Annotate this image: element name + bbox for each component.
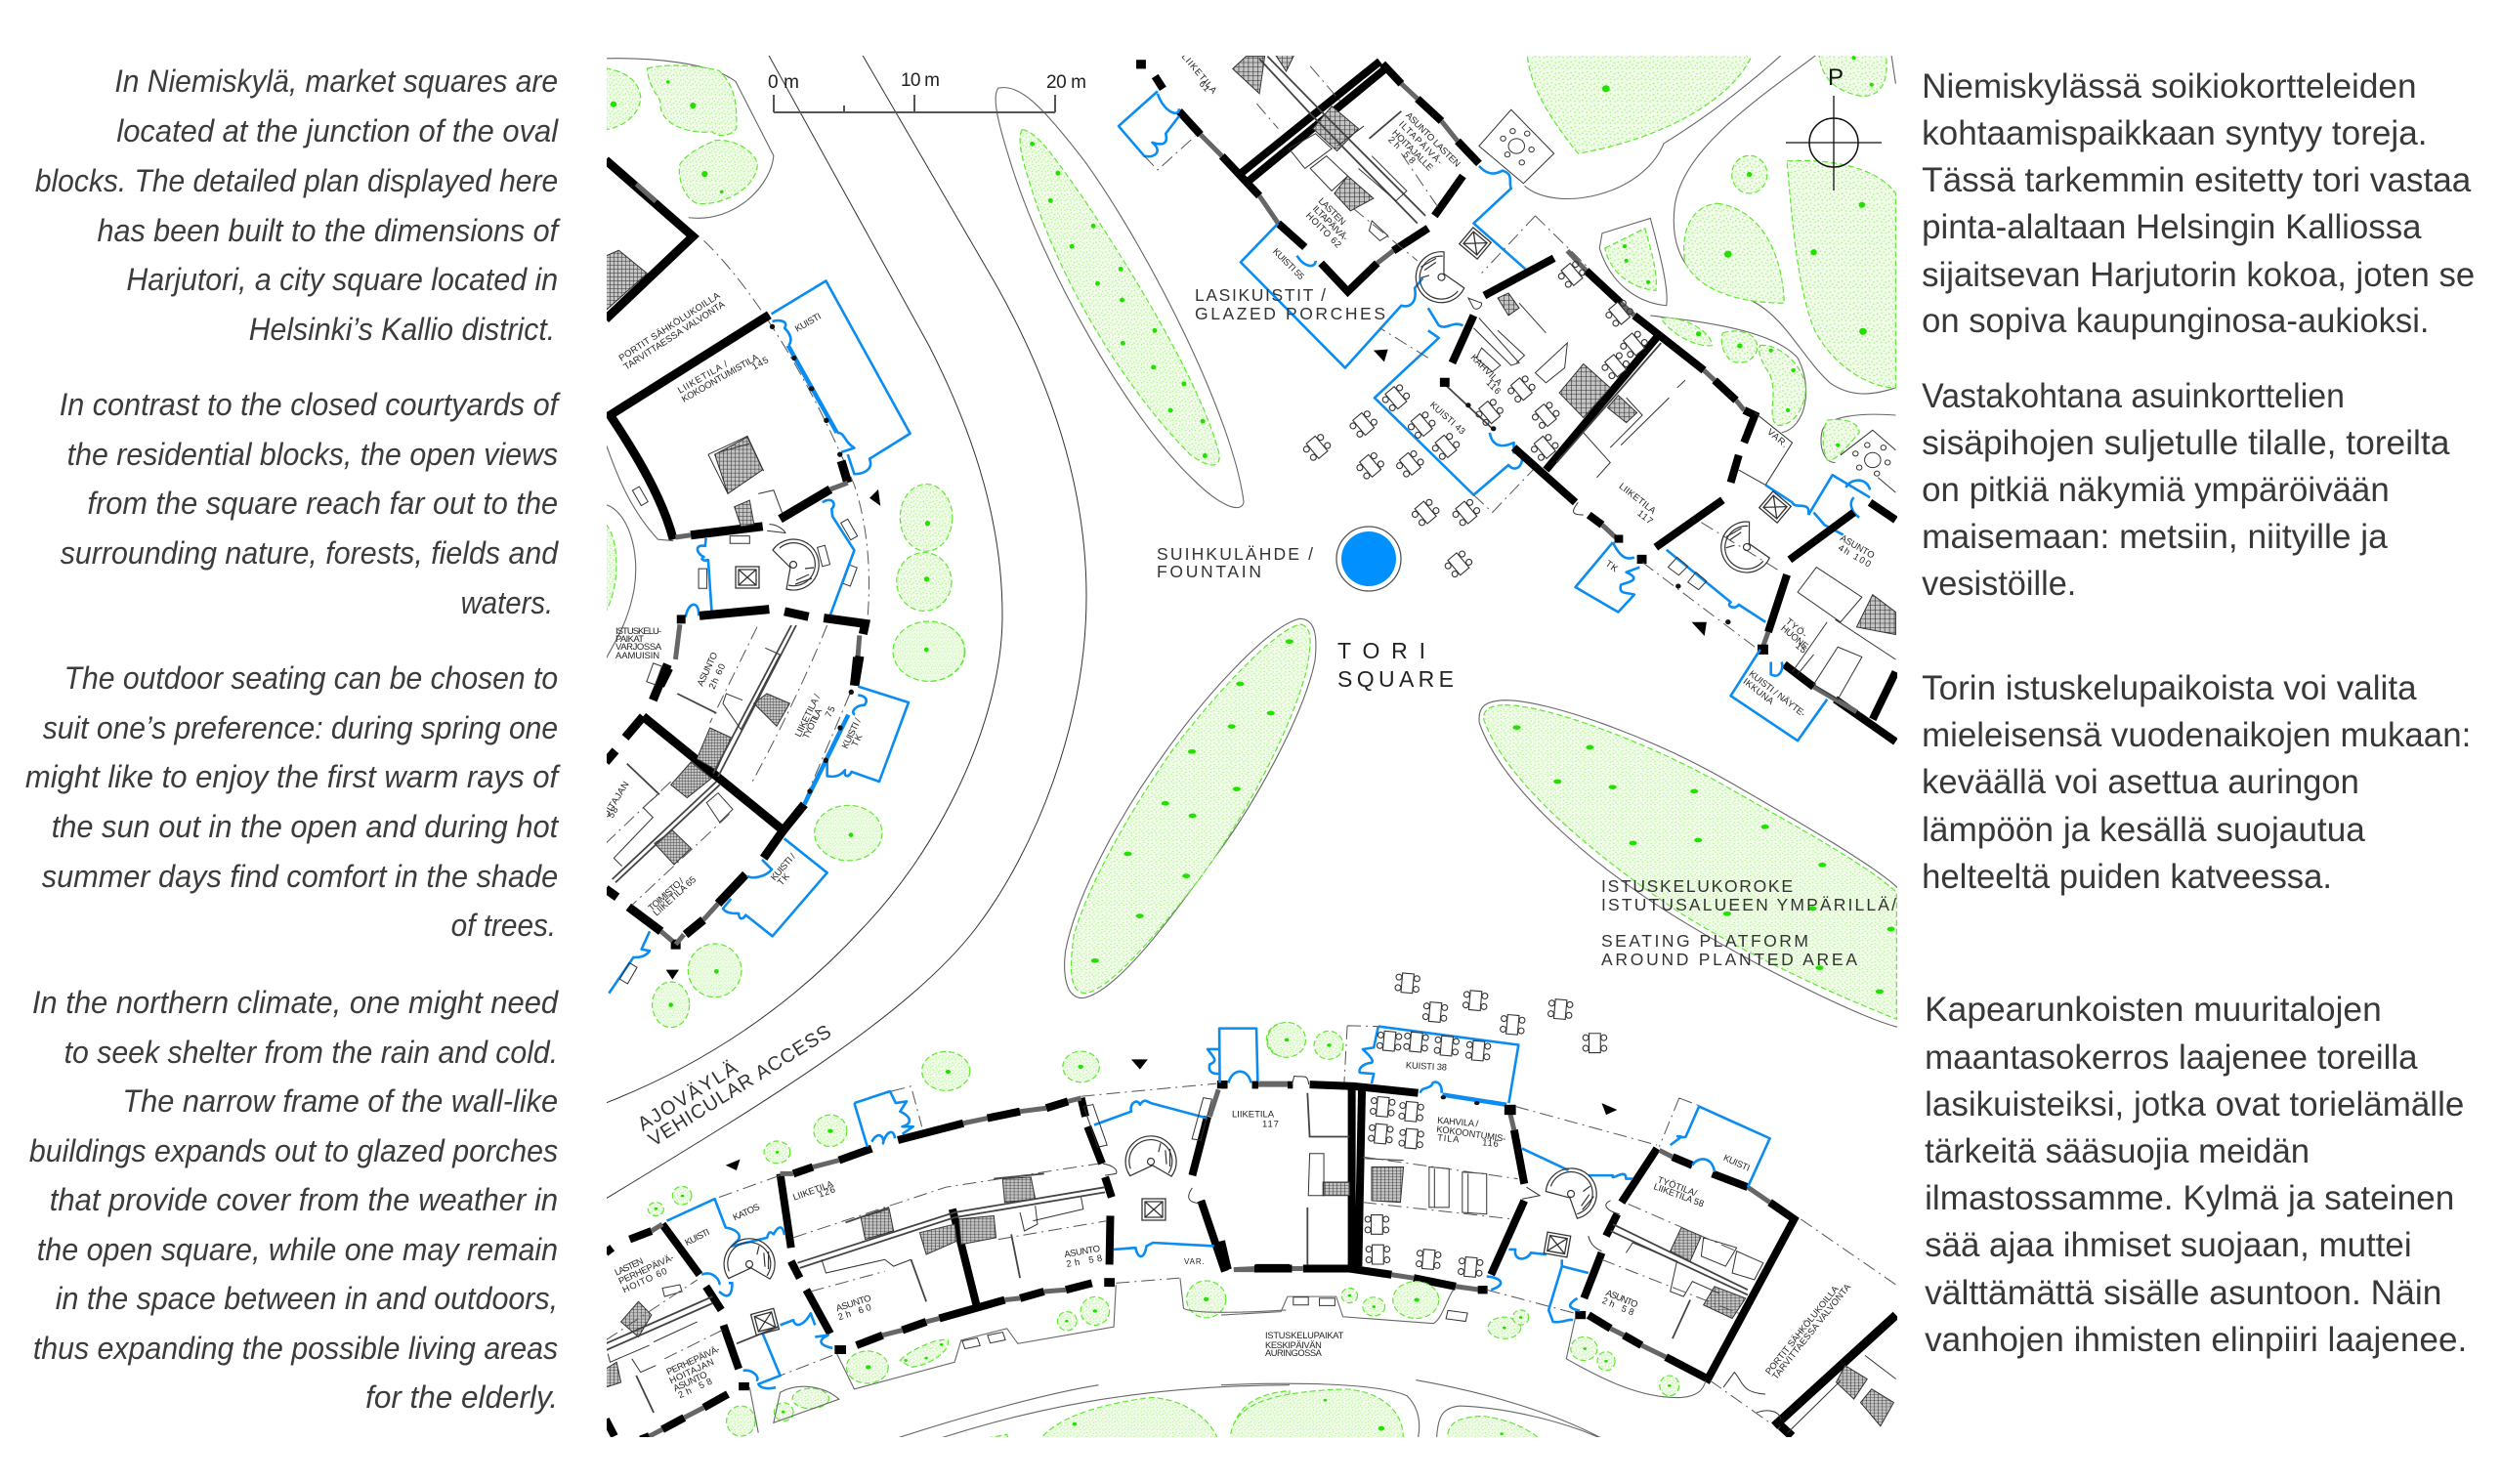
- kappale: istuskelupaikat: Torin istuskelupaikoista voi valita: [1922, 669, 2417, 707]
- labels: south east buildings: TARVITTAESSA VALVONTA: [1770, 1282, 1853, 1381]
- labels: west buildings: PORTIT SÄHKÖLUKOILLA: [617, 290, 723, 364]
- labels: north east buildings: KUISTI 43: [1428, 399, 1468, 437]
- kappale: lasikuistit: maantasokerros laajenee toreilla: [1925, 1039, 2418, 1077]
- building: east apartment: [1731, 502, 1895, 742]
- cafe and square tables: north east: [1301, 259, 1649, 579]
- labels: west buildings: HOITAJAN: [597, 779, 632, 827]
- paragraph: market squares: Harjutori, a city square located in: [126, 262, 558, 297]
- paragraph: outdoor seating: suit one’s preference: during spring one: [43, 710, 558, 745]
- planting strip: [648, 1051, 1290, 1443]
- kappale: Niemiskylän torit: kohtaamispaikkaan syntyy toreja.: [1922, 114, 2428, 152]
- labels: north east buildings: KAHVILA: [1468, 352, 1505, 388]
- pavilion seating circle: [1841, 430, 1895, 492]
- labels: north east buildings: 61: [1197, 78, 1213, 95]
- paragraph: northern climate: The narrow frame of the wall-like: [122, 1083, 558, 1119]
- callout: seating platform: SEATING PLATFORM: [1601, 931, 1808, 951]
- kappale: lasikuistit: lasikuisteiksi, jotka ovat torielämälle: [1925, 1085, 2464, 1124]
- labels: west buildings: TARVITTAESSA VALVONTA: [622, 299, 728, 373]
- paragraph: northern climate: the open square, while one may remain: [37, 1232, 558, 1267]
- planting bed: south west: [1065, 618, 1316, 998]
- labels: north east buildings: 2h 58: [1386, 134, 1419, 166]
- paragraph: northern climate: for the elderly.: [365, 1379, 558, 1415]
- paragraph: northern climate: buildings expands out to glazed porches: [29, 1133, 558, 1168]
- scale bar: [768, 70, 1086, 112]
- labels: south west buildings: PERHEPÄIVÄ-: [664, 1343, 722, 1377]
- labels: south west buildings: [613, 1109, 1280, 1400]
- kappale: lasikuistit: ilmastossamme. Kylmä ja sateinen: [1925, 1179, 2454, 1217]
- labels: south east buildings: AURINGOSSA: [1265, 1348, 1323, 1358]
- labels: west buildings: KUISTI /: [840, 716, 865, 750]
- labels: north east buildings: LASTEN: [1317, 195, 1349, 228]
- labels: west buildings: TYÖTILA: [801, 706, 826, 741]
- labels: north east buildings: TYÖ-: [1784, 615, 1810, 640]
- labels: west buildings: 75: [824, 703, 838, 719]
- labels: north east buildings: HOITAJALLE: [1390, 127, 1436, 173]
- porch: kuisti 55: [1119, 91, 1589, 512]
- central passage west: [726, 1029, 1290, 1271]
- paragraph: outdoor seating: of trees.: [451, 908, 556, 943]
- labels: south west buildings: ASUNTO: [834, 1292, 873, 1313]
- kappale: Niemiskylän torit: Tässä tarkemmin esitetty tori vastaa: [1922, 161, 2472, 199]
- callout: seating platform: ISTUSKELUKOROKE: [1601, 876, 1793, 896]
- north east planting beds: [1524, 55, 1895, 462]
- paragraph: northern climate: that provide cover from the weather in: [50, 1182, 558, 1217]
- labels: south east buildings: TILA: [1437, 1132, 1461, 1145]
- paragraph: market squares: blocks. The detailed plan displayed here: [35, 163, 558, 198]
- north east corner of south block: [1723, 1315, 1896, 1436]
- labels: west buildings: [597, 290, 866, 918]
- paragraph: market squares: Helsinki’s Kallio district.: [249, 312, 555, 347]
- callout: glazed porches: [1196, 288, 1385, 319]
- labels: north east buildings: VAR.: [1765, 426, 1791, 450]
- heading: tori / square: [1338, 643, 1453, 692]
- paragraph: market squares: [35, 64, 561, 347]
- labels: south east buildings: ISTUSKELUPAIKAT: [1265, 1331, 1344, 1340]
- labels: south west buildings: VAR.: [1184, 1257, 1206, 1266]
- labels: south west buildings: 117: [1262, 1119, 1280, 1129]
- labels: south east buildings: KUISTI 38: [1406, 1060, 1448, 1073]
- callout: vehicular access: VEHICULAR ACCESS: [645, 1021, 835, 1151]
- north arrow: [1786, 64, 1882, 191]
- labels: west buildings: LIIKETILA 65: [652, 874, 699, 918]
- text panel: Finnish description: [1922, 67, 2475, 1359]
- labels: south east buildings: ASUNTO: [1604, 1288, 1640, 1310]
- building: children's day care: [1136, 55, 1479, 291]
- porch: kuisti 38: [1344, 1026, 1518, 1105]
- labels: west buildings: TOIMISTO /: [647, 875, 687, 913]
- labels: west buildings: KUISTI: [793, 311, 824, 335]
- labels: north east buildings: TK: [1604, 558, 1621, 574]
- labels: north east buildings: HOITO 62: [1304, 210, 1344, 250]
- labels: south west buildings: LASTEN: [613, 1254, 646, 1278]
- kappale: Niemiskylän torit: sijaitsevan Harjutorin kokoa, joten se: [1922, 256, 2475, 294]
- labels: west buildings: AAMUISIN: [615, 651, 660, 661]
- paragraph: market squares: has been built to the dimensions of: [97, 213, 561, 248]
- lift shafts: [736, 228, 1791, 1336]
- labels: south west buildings: ASUNTO: [1063, 1243, 1102, 1259]
- planting bed: south east: [1479, 700, 1899, 1028]
- paragraph: northern climate: to seek shelter from the rain and cold.: [64, 1035, 558, 1070]
- paragraph: outdoor seating: the sun out in the open and during hot: [52, 809, 559, 844]
- paragraph: open views: the residential blocks, the open views: [67, 437, 558, 472]
- labels: south east buildings: LIIKETILA 58: [1652, 1181, 1706, 1209]
- labels: west buildings: LIIKETILA /: [676, 359, 731, 397]
- labels: south west buildings: HOITAJAN: [667, 1356, 716, 1385]
- labels: west buildings: 2h 60: [707, 661, 729, 691]
- paragraph: outdoor seating: might like to enjoy the first warm rays of: [25, 759, 561, 794]
- kappale: Niemiskylän torit: Niemiskylässä soikiokortteleiden: [1922, 67, 2417, 106]
- labels: south west buildings: 2h 58: [1065, 1252, 1104, 1269]
- paragraph: northern climate: [29, 985, 559, 1415]
- kappale: näkymät: sisäpihojen suljetulle tilalle, toreilta: [1922, 424, 2450, 462]
- labels: north east buildings: ILTAPÄIVÄ-: [1397, 118, 1446, 167]
- labels: south west buildings: 2h 58: [676, 1375, 714, 1400]
- kappale: näkymät: [1922, 377, 2450, 603]
- south west buildings: [606, 1023, 1301, 1443]
- room labels: [597, 51, 1878, 1400]
- labels: north east buildings: ASUNTO: [1839, 532, 1878, 561]
- callout: glazed porches: LASIKUISTIT /: [1195, 285, 1326, 305]
- labels: west buildings: KOKOONTUMISTILA: [680, 352, 761, 405]
- paragraph: northern climate: thus expanding the possible living areas: [33, 1331, 558, 1366]
- callout: fountain: SUIHKULÄHDE /: [1157, 544, 1313, 564]
- labels: south west buildings: PERHEPÄIVÄ-: [616, 1251, 676, 1287]
- text panel: English description: [25, 64, 561, 1415]
- road edge lines: [606, 54, 1086, 1199]
- labels: south east buildings: KOKOONTUMIS-: [1436, 1124, 1507, 1144]
- south oval planting beds: [1065, 618, 1899, 1028]
- labels: north east buildings: 116: [1484, 377, 1505, 397]
- labels: south east buildings: PORTIT SÄHKÖLUKOILLA: [1763, 1284, 1841, 1377]
- scale bar: 20 m: [1046, 72, 1086, 93]
- labels: north east buildings: KUISTI / NÄYTE-: [1747, 668, 1808, 719]
- labels: west buildings: 58: [606, 804, 621, 821]
- callout: seating platform: ISTUTUSALUEEN YMPÄRILLÄ/: [1601, 895, 1896, 914]
- labels: west buildings: 145: [750, 355, 772, 373]
- site plan drawing: [597, 51, 1899, 1443]
- labels: north east buildings: HUONE: [1779, 622, 1811, 652]
- labels: north east buildings: LIIKETILA: [1617, 481, 1659, 516]
- kappale: näkymät: maisemaan: metsiin, niityille ja: [1922, 518, 2388, 556]
- kappale: näkymät: on pitkiä näkymiä ympäröivään: [1922, 471, 2390, 509]
- kappale: lasikuistit: välttämättä sisälle asuntoon. Näin: [1925, 1274, 2441, 1312]
- kappale: lasikuistit: [1925, 991, 2467, 1359]
- labels: south west buildings: 126: [817, 1183, 837, 1200]
- labels: south west buildings: LIIKETILA: [1232, 1109, 1275, 1120]
- kappale: näkymät: vesistöille.: [1922, 565, 2076, 603]
- building: family day care: [606, 1083, 1216, 1439]
- labels: south east buildings: [1265, 1060, 1853, 1381]
- callout: seating platform: [1601, 876, 1896, 969]
- labels: west buildings: ISTUSKELU-: [615, 626, 662, 637]
- oval planting bed: north: [996, 88, 1244, 508]
- scale bar: 10 m: [901, 70, 940, 91]
- building: liiketila 126: [666, 1086, 1115, 1388]
- kappale: lasikuistit: sää ajaa ihmiset suojaan, muttei: [1925, 1226, 2412, 1264]
- paragraph: market squares: In Niemiskylä, market squares are: [114, 64, 558, 99]
- south strip planting and benches: [1221, 1022, 1706, 1443]
- labels: north east buildings: IKKUNA: [1741, 676, 1777, 707]
- labels: south east buildings: KUISTI: [1722, 1153, 1752, 1173]
- paragraph: open views: from the square reach far out to the: [88, 486, 558, 521]
- kappale: näkymät: Vastakohtana asuinkorttelien: [1922, 377, 2345, 415]
- labels: west buildings: KUISTI /: [769, 851, 799, 883]
- labels: north east buildings: [1180, 51, 1878, 719]
- south east buildings: [1221, 1022, 1896, 1443]
- labels: west buildings: ASUNTO: [696, 650, 721, 688]
- paragraph: outdoor seating: The outdoor seating can be chosen to: [64, 660, 558, 696]
- paragraph: open views: In contrast to the closed courtyards of: [60, 387, 561, 422]
- labels: north east buildings: LIIKETILA: [1180, 51, 1220, 96]
- kappale: istuskelupaikat: mieleisensä vuodenaikojen mukaan:: [1922, 716, 2471, 754]
- paragraph: outdoor seating: [25, 660, 561, 943]
- spiral stairs: [718, 248, 1771, 1293]
- callout: fountain: FOUNTAIN: [1157, 562, 1261, 581]
- heading: tori / square: SQUARE: [1337, 666, 1454, 692]
- labels: south east buildings: 116: [1482, 1137, 1500, 1149]
- kappale: lasikuistit: vanhojen ihmisten elinpiiri laajenee.: [1925, 1321, 2467, 1359]
- kappale: lasikuistit: tärkeitä sääsuojia meidän: [1925, 1132, 2310, 1170]
- kappale: lasikuistit: Kapearunkoisten muuritalojen: [1925, 991, 2382, 1029]
- paragraph: outdoor seating: summer days find comfort in the shade: [42, 859, 558, 894]
- heading: tori / square: TORI: [1337, 638, 1425, 663]
- callout: fountain: [1157, 545, 1313, 577]
- labels: west buildings: TK: [850, 732, 866, 748]
- labels: north east buildings: ASUNTO LASTEN: [1404, 109, 1463, 170]
- kappale: istuskelupaikat: keväällä voi asettua auringon: [1922, 763, 2359, 801]
- labels: north east buildings: 4h 100: [1837, 542, 1874, 570]
- paragraph: open views: surrounding nature, forests, fields and: [61, 535, 559, 571]
- labels: south west buildings: 2h 60: [836, 1301, 873, 1322]
- labels: west buildings: LIIKETILA /: [793, 692, 824, 739]
- paragraph: northern climate: In the northern climate, one might need: [32, 985, 559, 1020]
- kappale: Niemiskylän torit: pinta-alaltaan Helsingin Kalliossa: [1922, 208, 2422, 246]
- paragraph: market squares: located at the junction of the oval: [116, 113, 559, 148]
- labels: west buildings: TK: [776, 870, 792, 888]
- paragraph: northern climate: in the space between in and outdoors,: [56, 1281, 558, 1316]
- labels: south west buildings: LIIKETILA: [791, 1177, 835, 1203]
- callout: glazed porches: GLAZED PORCHES: [1195, 304, 1385, 323]
- labels: west buildings: VARJOSSA: [615, 642, 662, 653]
- north arrow: P: [1828, 64, 1844, 91]
- callout: seating platform: AROUND PLANTED AREA: [1601, 950, 1857, 969]
- north east buildings and planting: [1119, 55, 1895, 742]
- paragraph: open views: [60, 387, 561, 620]
- kappale: istuskelupaikat: helteeltä puiden katveessa.: [1922, 858, 2332, 896]
- labels: south east buildings: KAHVILA /: [1437, 1116, 1480, 1128]
- kappale: Niemiskylän torit: [1922, 67, 2475, 340]
- labels: south east buildings: 2h 58: [1600, 1295, 1636, 1318]
- building: work and apartment: [1487, 1098, 1896, 1422]
- kappale: istuskelupaikat: [1922, 669, 2471, 896]
- labels: north east buildings: 117: [1635, 507, 1656, 527]
- labels: south east buildings: KESKIPÄIVÄN: [1265, 1340, 1323, 1350]
- labels: south east buildings: TYÖTILA/: [1656, 1174, 1699, 1199]
- kappale: Niemiskylän torit: on sopiva kaupunginosa-aukioksi.: [1922, 302, 2430, 340]
- building: kahvila and liiketila 117: [1221, 1077, 1524, 1293]
- building: cafe and commercial unit: [1440, 251, 1870, 647]
- labels: south west buildings: ASUNTO: [671, 1368, 709, 1393]
- upper left planting and porch building: [606, 59, 1244, 686]
- kappale: istuskelupaikat: lämpöön ja kesällä suojautua: [1922, 811, 2365, 849]
- labels: north east buildings: 15: [1794, 640, 1809, 656]
- labels: south west buildings: HOITO 60: [620, 1265, 669, 1294]
- curved west building: [606, 621, 964, 1028]
- cafe and square tables: south: [1365, 972, 1607, 1278]
- labels: south west buildings: KATOS: [731, 1201, 762, 1222]
- callout: vehicular access: AJOVÄYLÄ: [634, 1057, 742, 1135]
- labels: north east buildings: ILTAPÄIVÄ-: [1311, 203, 1351, 243]
- labels: north east buildings: KUISTI 55: [1271, 246, 1307, 282]
- scale bar: 0 m: [768, 72, 799, 93]
- labels: west buildings: PAIKAT: [615, 634, 645, 645]
- paragraph: open views: waters.: [461, 585, 553, 620]
- labels: south west buildings: KUISTI: [683, 1226, 712, 1248]
- fountain: [1336, 527, 1401, 591]
